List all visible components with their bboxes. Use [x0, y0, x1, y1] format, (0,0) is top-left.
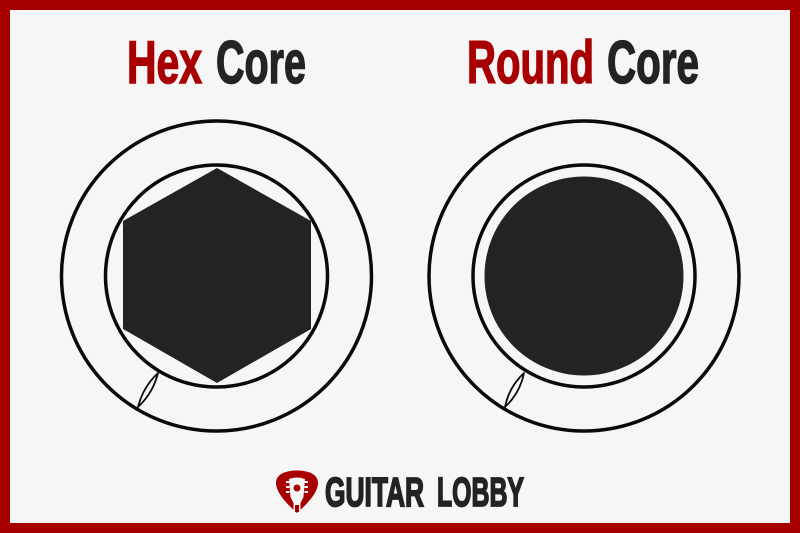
outer winding circle	[62, 121, 372, 431]
inner wrap circle	[106, 165, 328, 387]
heading: Hex Core: Hex	[127, 29, 202, 96]
diagram: round core string	[429, 121, 739, 431]
logo: Guitar Lobby	[276, 469, 524, 515]
logo text: GUITAR	[325, 469, 424, 515]
tuners	[286, 481, 308, 493]
outer winding circle	[429, 121, 739, 431]
diagram: hex core string	[62, 121, 372, 431]
heading: Round Core: Core	[607, 29, 699, 96]
wrap seam	[138, 373, 158, 407]
heading: Hex Core: Core	[216, 29, 306, 96]
logo text: LOBBY	[437, 469, 524, 515]
heading: Round Core: Round	[467, 29, 594, 96]
hexagonal core	[123, 168, 311, 383]
heading: Hex Core	[127, 29, 306, 96]
wrap seam	[505, 373, 524, 407]
round core	[484, 176, 684, 376]
inner wrap circle	[473, 165, 695, 387]
icon: guitar pick with headstock	[276, 470, 318, 513]
